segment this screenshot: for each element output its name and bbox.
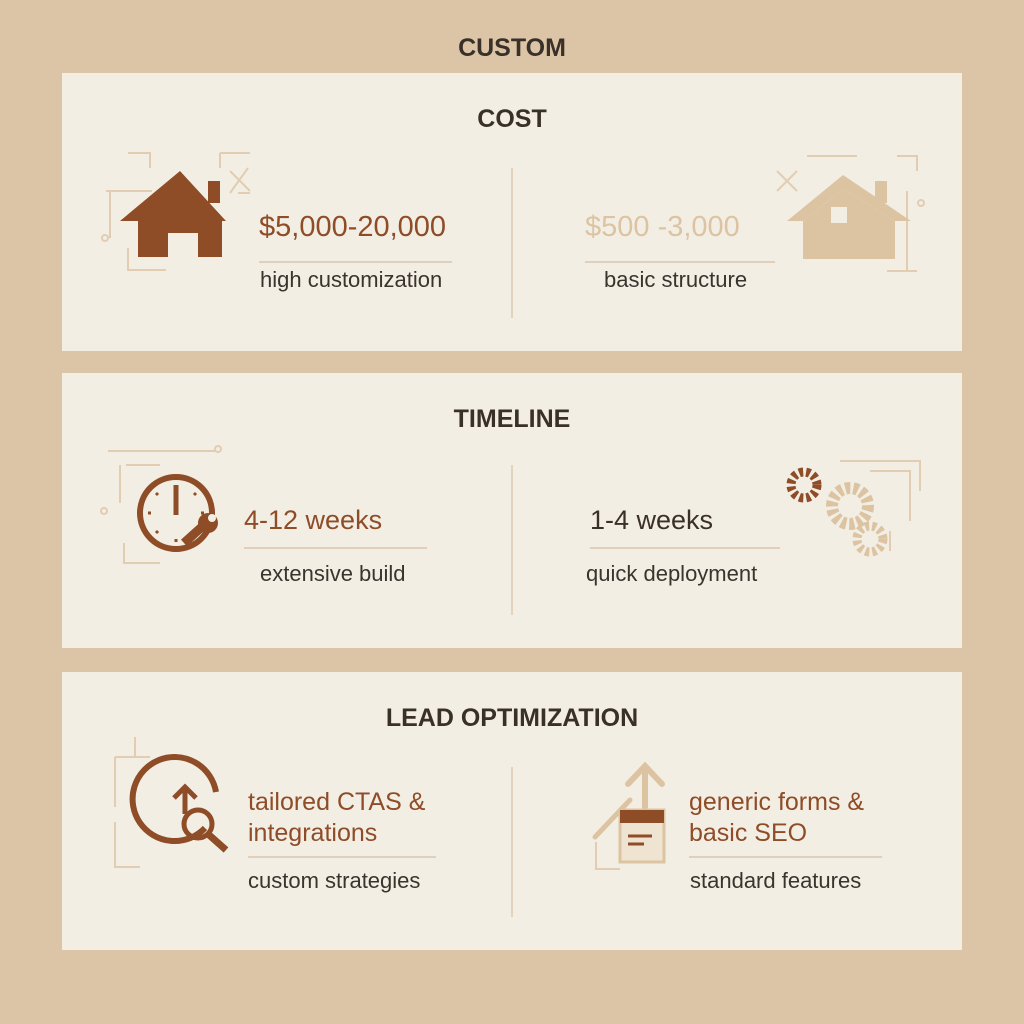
- text: basic structure: basic structure: [604, 267, 747, 292]
- text: high customization: high customization: [260, 267, 442, 292]
- heading: lead optimization: LEAD OPTIMIZATION: [386, 704, 638, 732]
- panel: lead optimization: [62, 672, 962, 950]
- icon: form arrow: [592, 762, 666, 870]
- value: template cost: $500 -3,000: [585, 211, 740, 243]
- text: quick deployment: quick deployment: [586, 561, 757, 586]
- text: generic forms: [689, 788, 864, 847]
- icon: magnifier arrow: [114, 737, 228, 868]
- icon: gears: [786, 460, 921, 556]
- icon: custom house: [101, 152, 251, 271]
- text: generic forms: generic forms &: [689, 788, 864, 816]
- icon: template house: [776, 155, 925, 272]
- text: tailored CTAs: [248, 788, 426, 847]
- value: template timeline: 1-4 weeks: [590, 505, 713, 535]
- value: custom timeline: 4-12 weeks: [244, 505, 382, 535]
- panel: cost: [62, 73, 962, 351]
- text: custom strategies: custom strategies: [248, 868, 420, 893]
- text: tailored CTAs: integrations: [248, 819, 377, 847]
- title: CUSTOM: [458, 34, 566, 62]
- text: generic forms: basic SEO: [689, 819, 807, 847]
- text: extensive build: extensive build: [260, 561, 406, 586]
- value: custom cost: $5,000-20,000: [259, 211, 446, 243]
- panel: timeline: [62, 373, 962, 648]
- text: tailored CTAs: tailored CTAS &: [248, 788, 425, 816]
- text: standard features: standard features: [690, 868, 861, 893]
- icon: clock with wrench: [100, 445, 222, 564]
- heading: cost: COST: [477, 105, 547, 133]
- heading: timeline: TIMELINE: [454, 405, 570, 433]
